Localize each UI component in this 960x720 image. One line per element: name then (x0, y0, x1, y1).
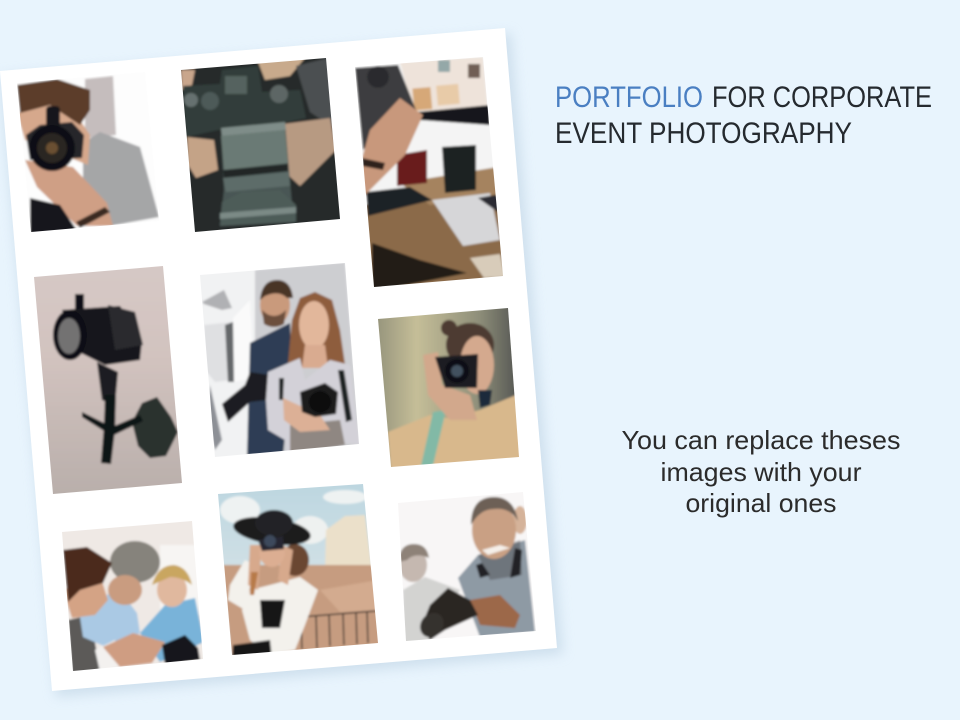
title (555, 81, 932, 150)
title: EVENT PHOTOGRAPHY (555, 117, 852, 150)
photo: three people looking at a camera (62, 521, 203, 671)
photo: hands holding camera with large lens (181, 58, 340, 232)
photo: woman with camera to her eye (378, 308, 519, 467)
photo: hand holding camera over desk (355, 57, 503, 287)
photo: camera on mini tripod (34, 266, 182, 494)
text block: replacement note: You can replace theses (622, 425, 900, 455)
title: PORTFOLIO (555, 81, 703, 114)
text block: replacement note (622, 425, 900, 518)
photo: man and woman with cameras in studio (195, 260, 365, 460)
photo: woman in black hat on rooftop (218, 484, 378, 655)
panel: tilted white photo sheet (0, 28, 563, 697)
text block: replacement note: original ones (686, 488, 836, 518)
photo: smiling man showing camera to colleague (398, 492, 536, 641)
photo: man aiming camera (17, 75, 158, 232)
text block: replacement note: images with your (660, 457, 862, 487)
